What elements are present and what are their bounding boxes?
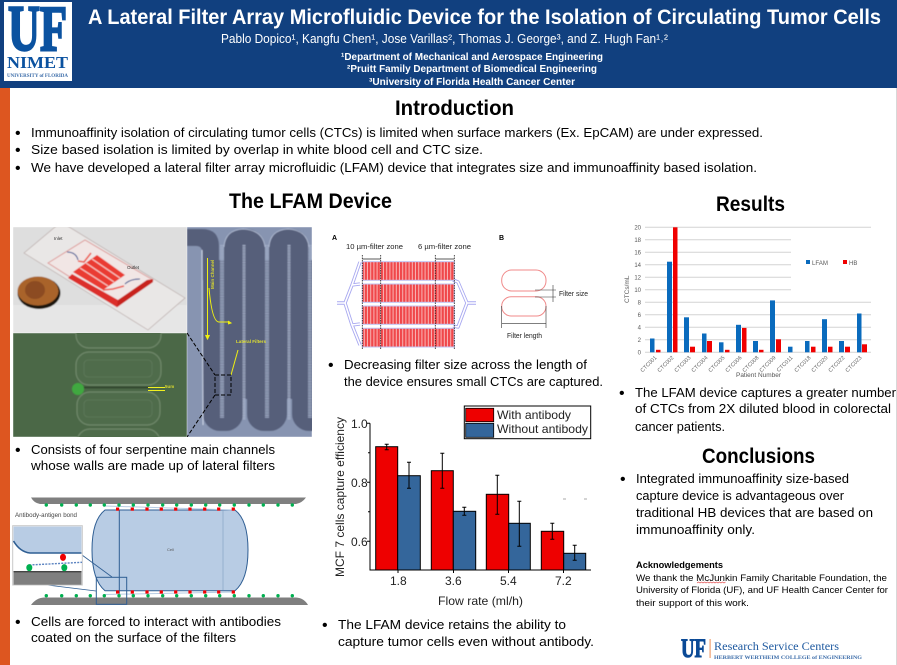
x axis labels: CTC008 <box>742 355 760 374</box>
affiliations <box>341 51 603 88</box>
acknowledgements: Acknowledgements <box>636 560 723 571</box>
y axis labels: 2 <box>638 338 642 344</box>
text: retains ability: The LFAM device retains the ability to <box>338 618 566 632</box>
diagram B: filter dimensions: Filter length <box>507 331 542 340</box>
title: A Lateral Filter Array Microfluidic Device for the Isolation of Circulating Tumor Cells <box>88 6 881 29</box>
x axis labels: CTC011 <box>776 355 794 374</box>
text: results bullet: cancer patients. <box>635 420 725 434</box>
bar chart: capture efficiency vs flow rate: 0.6 <box>351 535 368 549</box>
acknowledgements: University of Florida (UF), and UF Health Cancer Center for <box>636 585 888 596</box>
y axis labels: 8 <box>638 300 642 306</box>
text: four serpentine channels: Consists of four serpentine main channels <box>31 443 275 457</box>
heading: The LFAM Device: The LFAM Device <box>229 189 392 213</box>
heading: Introduction: Introduction <box>395 96 514 120</box>
text: decreasing filter size: • <box>328 357 334 374</box>
text: decreasing filter size: Decreasing filter size across the length of <box>344 358 588 372</box>
micrograph: green cell at filter <box>13 333 187 437</box>
header band <box>0 0 897 88</box>
x axis labels: CTC001 <box>640 355 658 374</box>
logo: UF Research Service Centers: UF <box>681 634 706 663</box>
HB bars <box>656 227 867 352</box>
diagram A: filter zones: 6 µm-filter zone <box>418 242 471 251</box>
introduction bullets: • <box>15 160 21 177</box>
text: four serpentine channels <box>15 442 275 473</box>
bar chart: capture efficiency vs flow rate <box>333 406 591 608</box>
annotation: lateral filters <box>231 339 266 375</box>
logo: UF Research Service Centers: Research Service Centers <box>714 639 839 653</box>
chart legend <box>464 406 591 439</box>
text: cells forced to interact: • <box>15 614 21 631</box>
y axis labels: 16 <box>634 250 642 256</box>
bar chart: capture efficiency vs flow rate: 1.8 <box>390 574 407 588</box>
heading: Results: Results <box>716 192 785 216</box>
x axis labels: CTC003 <box>674 355 692 374</box>
photo: device beside a penny: Outlet <box>127 265 140 270</box>
text: conclusions bullet: • <box>620 471 626 488</box>
y axis labels: 14 <box>634 263 642 269</box>
chart legend <box>806 260 857 267</box>
introduction bullets: We have developed a lateral filter array microfluidic (LFAM) device that integrates size and immunoaffinity based isolation. <box>31 161 757 175</box>
bar chart: capture efficiency vs flow rate: Flow rate (ml/h) <box>438 594 523 608</box>
text: four serpentine channels: whose walls are made up of lateral filters <box>30 459 275 473</box>
bar chart: CTCs per mL by patient: CTCs/mL <box>624 275 631 303</box>
x axis labels: CTC006 <box>725 355 743 374</box>
introduction bullets: • <box>15 142 21 159</box>
bar chart: CTCs per mL by patient <box>624 226 871 379</box>
bar chart: capture efficiency vs flow rate: 3.6 <box>445 574 462 588</box>
y axis labels: 10 <box>634 288 642 294</box>
diagram: cell between filters <box>13 498 308 605</box>
zoom box <box>215 375 231 395</box>
orange side bar <box>0 88 10 665</box>
logo: UF Research Service Centers: HERBERT WERTHEIM COLLEGE of ENGINEERING <box>714 655 863 661</box>
diagram B: filter dimensions: Filter size <box>559 289 588 298</box>
diagram A: filter zones <box>332 235 476 349</box>
acknowledgements <box>636 560 888 609</box>
diagram B: filter dimensions: B <box>499 235 504 242</box>
chart legend: Without antibody <box>497 422 588 436</box>
text: conclusions bullet: immunoaffinity only. <box>636 523 755 537</box>
bar chart: capture efficiency vs flow rate: 1.0 <box>351 417 368 431</box>
affiliations: ¹Department of Mechanical and Aerospace Engineering <box>341 51 603 63</box>
chart legend: HB <box>849 261 857 267</box>
affiliations: ³University of Florida Health Cancer Center <box>369 76 575 88</box>
x axis labels: CTC018 <box>794 355 812 374</box>
x axis labels: CTC022 <box>828 355 846 374</box>
text: results bullet: of CTCs from 2X diluted blood in colorectal <box>635 402 891 416</box>
x axis labels: CTC005 <box>708 355 726 374</box>
y axis labels: 20 <box>634 226 642 232</box>
text: retains ability: capture tumor cells even without antibody. <box>338 635 594 649</box>
y axis labels <box>634 226 642 356</box>
LFAM bars <box>650 262 862 352</box>
x axis labels: CTC002 <box>657 355 675 374</box>
logo: UF NIMET: NIMET <box>7 53 69 72</box>
chart legend: LFAM <box>812 261 828 267</box>
diagram A: filter zones: A <box>332 235 337 242</box>
y axis labels: 4 <box>638 326 642 332</box>
grid <box>645 227 871 352</box>
bar chart: CTCs per mL by patient: Patient Number <box>736 372 782 379</box>
bar chart: capture efficiency vs flow rate: 0.8 <box>351 476 368 490</box>
x axis labels: CTC023 <box>845 355 863 374</box>
y axis labels: 18 <box>634 238 642 244</box>
bar chart: capture efficiency vs flow rate: MCF 7 cells capture efficiency <box>333 417 347 577</box>
text: conclusions bullet <box>620 471 873 537</box>
bar chart: capture efficiency vs flow rate: 5.4 <box>500 574 517 588</box>
text: cells forced to interact: coated on the surface of the filters <box>31 631 236 645</box>
zoom box: bond <box>96 577 127 604</box>
annotation: lateral filters: Lateral Filters <box>236 339 266 344</box>
text: results bullet: • <box>619 385 625 402</box>
x axis labels <box>640 355 863 374</box>
logo: UF NIMET <box>4 0 72 81</box>
x axis labels: CTC004 <box>691 355 709 374</box>
text: cells forced to interact: Cells are forced to interact with antibodies <box>31 615 281 629</box>
axes <box>367 423 591 573</box>
text: results bullet: The LFAM device captures a greater number <box>635 386 896 400</box>
text: cells forced to interact <box>15 614 281 645</box>
bar chart: capture efficiency vs flow rate: 7.2 <box>555 574 572 588</box>
text: results bullet <box>619 385 896 434</box>
annotation: main channel arrows <box>206 258 231 339</box>
introduction bullets: • <box>15 125 21 142</box>
acknowledgements: their support of this work. <box>636 598 749 609</box>
diagram: cell between filters: Cell <box>167 547 174 552</box>
photo: device beside a penny: Inlet <box>54 236 63 241</box>
affiliations: ²Pruitt Family Department of Biomedical Engineering <box>347 63 597 75</box>
text: decreasing filter size: the device ensures small CTCs are captured. <box>344 375 603 389</box>
micrograph: serpentine channels <box>187 227 312 437</box>
micrograph: serpentine channels: Main Channel <box>210 260 215 289</box>
logo: UF Research Service Centers <box>681 634 863 663</box>
text: decreasing filter size <box>328 357 603 389</box>
micrograph: green cell at filter: 5um <box>165 384 174 389</box>
photo: device beside a penny <box>13 222 187 333</box>
text: conclusions bullet: traditional HB devices that are based on <box>636 506 873 520</box>
introduction bullets <box>15 125 763 177</box>
text: conclusions bullet: capture device is advantageous over <box>636 489 844 503</box>
acknowledgements: We thank the McJunkin Family Charitable Foundation, the <box>636 573 887 584</box>
inset: bond close-up <box>13 526 82 585</box>
y axis labels: 12 <box>634 276 642 282</box>
diagram A: filter zones: 10 µm-filter zone <box>346 242 403 251</box>
text: retains ability: • <box>322 617 328 634</box>
introduction bullets: Immunoaffinity isolation of circulating tumor cells (CTCs) is limited when surface markers (Ex. EpCAM) are under expressed. <box>31 126 763 140</box>
text: conclusions bullet: Integrated immunoaffinity size-based <box>636 472 849 486</box>
text: four serpentine channels: • <box>15 442 21 459</box>
error bars <box>385 444 577 560</box>
y axis labels: 6 <box>638 313 642 319</box>
y axis labels: 0 <box>638 350 642 356</box>
logo: UF NIMET: UNIVERSITY of FLORIDA <box>7 74 68 79</box>
x axis labels: CTC020 <box>811 355 829 374</box>
bars <box>376 447 586 570</box>
chart legend: With antibody <box>497 408 571 422</box>
text: retains ability <box>322 617 594 649</box>
diagram B: filter dimensions <box>499 235 588 340</box>
heading: Conclusions: Conclusions <box>702 444 815 468</box>
label: antibody-antigen bond: Antibody-antigen bond <box>15 513 77 519</box>
introduction bullets: Size based isolation is limited by overlap in white blood cell and CTC size. <box>31 143 483 157</box>
x axis labels: CTC009 <box>759 355 777 374</box>
authors: Pablo Dopico¹, Kangfu Chen¹, Jose Varillas², Thomas J. George³, and Z. Hugh Fan¹˒² <box>221 32 668 46</box>
